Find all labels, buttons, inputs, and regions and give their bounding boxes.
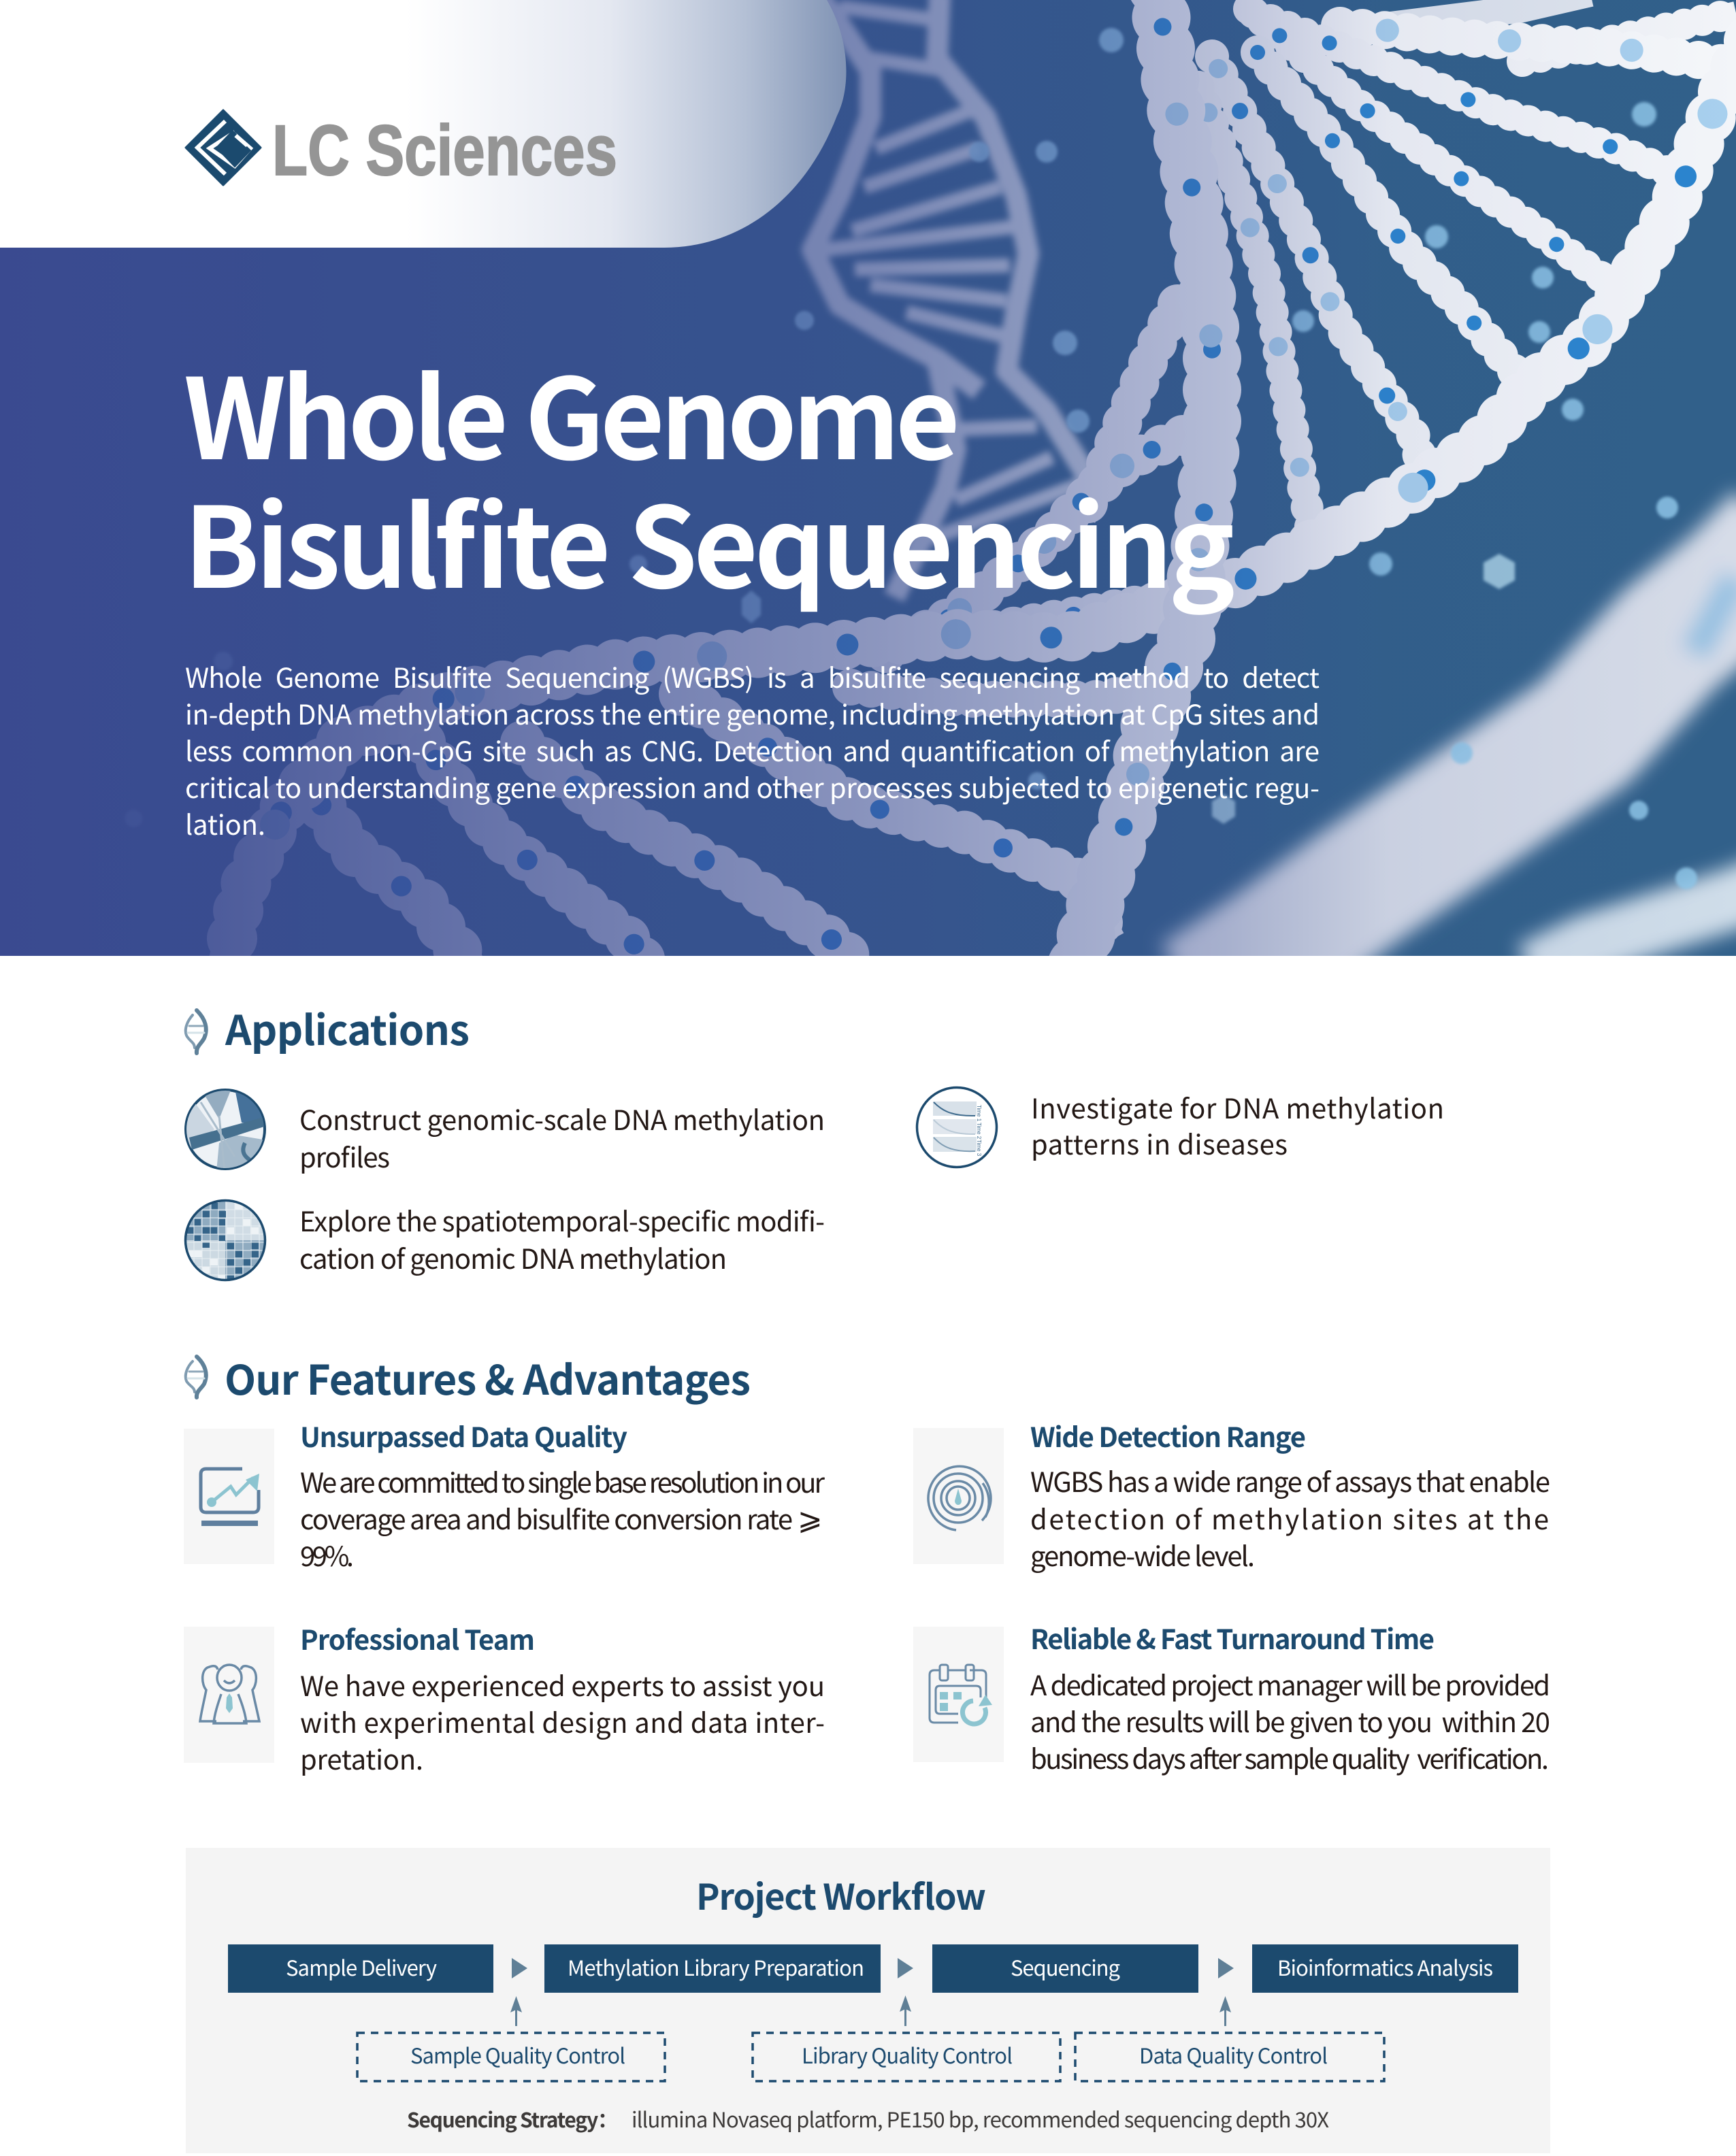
arrow: library QC up xyxy=(900,1995,911,2026)
logo wordmark: LC Sciences xyxy=(272,111,617,190)
text: diseases xyxy=(1031,1087,1444,1163)
panel: features and advantages xyxy=(184,1348,1550,1778)
step: Sample Delivery xyxy=(228,1944,493,1993)
text: construct profiles: profiles xyxy=(299,1136,390,1176)
icon: time series charts: Time 2 xyxy=(976,1123,982,1140)
hero intro paragraph: lation. xyxy=(185,803,265,843)
feature: wide detection range: detection of methylation sites at the xyxy=(1030,1498,1549,1538)
icon: calendar with refresh xyxy=(930,1665,992,1724)
feature: turnaround time: A dedicated project manager will be provided xyxy=(1030,1664,1550,1704)
feature: data quality: We are committed to single base resolution in our xyxy=(300,1461,825,1501)
box: Library Quality Control: Library Quality Control xyxy=(802,2039,1013,2070)
hero intro paragraph: in-depth DNA methylation across the entire genome, including methylation at CpG sites and xyxy=(185,693,1320,733)
feature: wide detection range: genome-wide level. xyxy=(1030,1535,1255,1574)
text: construct profiles: Construct genomic-scale DNA methylation xyxy=(299,1099,825,1138)
box: Sample Quality Control xyxy=(357,2033,665,2081)
feature: data quality: ⩾ xyxy=(798,1502,823,1537)
text: diseases: patterns in diseases xyxy=(1031,1123,1288,1163)
feature: professional team: We have experienced experts to assist you xyxy=(300,1665,825,1704)
step: Sequencing: Sequencing xyxy=(1011,1951,1121,1982)
step: Sample Delivery: Sample Delivery xyxy=(286,1951,437,1982)
sequencing strategy note: illumina Novaseq platform, PE150 bp, recommended sequencing depth 30X xyxy=(632,2103,1329,2134)
hero intro paragraph: Whole Genome Bisulfite Sequencing (WGBS) is a bisulfite sequencing method to detect xyxy=(185,657,1320,696)
box: Data Quality Control: Data Quality Control xyxy=(1139,2039,1328,2070)
large blurred DNA strand, lower right xyxy=(1198,537,1736,1000)
icon: methylation heatmap xyxy=(184,1199,266,1282)
blue-violet colour overlay xyxy=(0,0,1550,956)
icon: time series charts xyxy=(917,1087,996,1167)
feature: data quality: 99%. xyxy=(300,1535,354,1574)
step: Methylation Library Preparation xyxy=(544,1944,881,1993)
hero title: Bisulfite Sequencing xyxy=(184,459,1235,620)
foreground DNA rungs xyxy=(306,0,1736,966)
sequencing strategy note: Sequencing Strategy： xyxy=(407,2104,618,2134)
icon: chord diagram xyxy=(179,1089,267,1173)
feature: data quality: coverage area and bisulfite conversion rate xyxy=(300,1498,793,1538)
icon: chart monitor xyxy=(201,1469,259,1526)
logo: LC Sciences xyxy=(186,110,617,190)
feature: turnaround time: Reliable & Fast Turnaround Time xyxy=(1030,1618,1435,1657)
feature: data quality: Unsurpassed Data Quality xyxy=(300,1416,627,1455)
feature: professional team: pretation. xyxy=(300,1738,423,1778)
logo mark diamond xyxy=(186,110,261,185)
feature: wide detection range: WGBS has a wide range of assays that enable xyxy=(1030,1461,1550,1500)
text: diseases: Investigate for DNA methylation xyxy=(1031,1087,1444,1127)
feature: professional team: with experimental design and data inter- xyxy=(300,1702,825,1741)
section icon: DNA xyxy=(186,1010,206,1053)
arrow: data QC up xyxy=(1219,1996,1231,2026)
section icon: DNA xyxy=(186,1357,206,1397)
heading: Project Workflow: Project Workflow xyxy=(696,1869,986,1920)
hero title xyxy=(186,370,1233,615)
foreground DNA strands xyxy=(226,0,1736,966)
panel: applications xyxy=(179,998,1444,1282)
feature: turnaround time: business days after sample quality verification. xyxy=(1030,1738,1549,1777)
hero banner xyxy=(0,0,1736,1000)
step: Sequencing xyxy=(932,1944,1198,1993)
feature: professional team: Professional Team xyxy=(300,1619,535,1658)
hero intro paragraph: less common non-CpG site such as CNG. Detection and quantification of methylation are xyxy=(185,730,1320,769)
logo panel xyxy=(0,0,847,248)
box: Data Quality Control xyxy=(1075,2033,1384,2081)
icon: time series charts: Time 1 xyxy=(976,1105,982,1122)
step: Bioinformatics Analysis: Bioinformatics Analysis xyxy=(1277,1951,1493,1982)
feature: data quality xyxy=(184,1416,825,1574)
icon: time series charts: Time 3 xyxy=(976,1140,982,1157)
feature: wide detection range xyxy=(913,1416,1550,1574)
heading: Applications: Applications xyxy=(225,998,470,1057)
arrow: sample QC up xyxy=(510,1996,522,2026)
arrow: step 3 to 4 xyxy=(1218,1958,1234,1978)
text: spatiotemporal: cation of genomic DNA methylation xyxy=(299,1238,727,1277)
hero intro paragraph: critical to understanding gene expression and other processes subjected to epigenetic regu- xyxy=(185,767,1320,806)
floating particles xyxy=(125,28,1697,889)
text: spatiotemporal: Explore the spatiotemporal-specific modifi- xyxy=(299,1200,825,1240)
arrow: step 1 to 2 xyxy=(512,1958,527,1978)
hero intro paragraph xyxy=(185,657,1320,843)
feature: professional team xyxy=(184,1619,825,1778)
feature: wide detection range: Wide Detection Range xyxy=(1030,1416,1306,1455)
background DNA helix (blurred) xyxy=(813,0,1102,597)
arrow: step 2 to 3 xyxy=(898,1958,913,1978)
box: Library Quality Control xyxy=(753,2033,1060,2081)
step: Bioinformatics Analysis xyxy=(1252,1944,1518,1993)
panel: project workflow xyxy=(186,1848,1550,2153)
icon: concentric target xyxy=(928,1466,991,1530)
text: spatiotemporal xyxy=(299,1200,825,1277)
box: Sample Quality Control: Sample Quality Control xyxy=(410,2039,625,2070)
icon: team xyxy=(200,1665,259,1723)
step: Methylation Library Preparation: Methylation Library Preparation xyxy=(568,1951,864,1982)
text: construct profiles xyxy=(299,1099,825,1176)
feature: turnaround time xyxy=(913,1618,1550,1777)
feature: turnaround time: and the results will be given to you within 20 xyxy=(1030,1701,1550,1740)
hero title: Whole Genome xyxy=(184,331,960,492)
heading: Our Features & Advantages: Our Features & Advantages xyxy=(225,1348,751,1407)
